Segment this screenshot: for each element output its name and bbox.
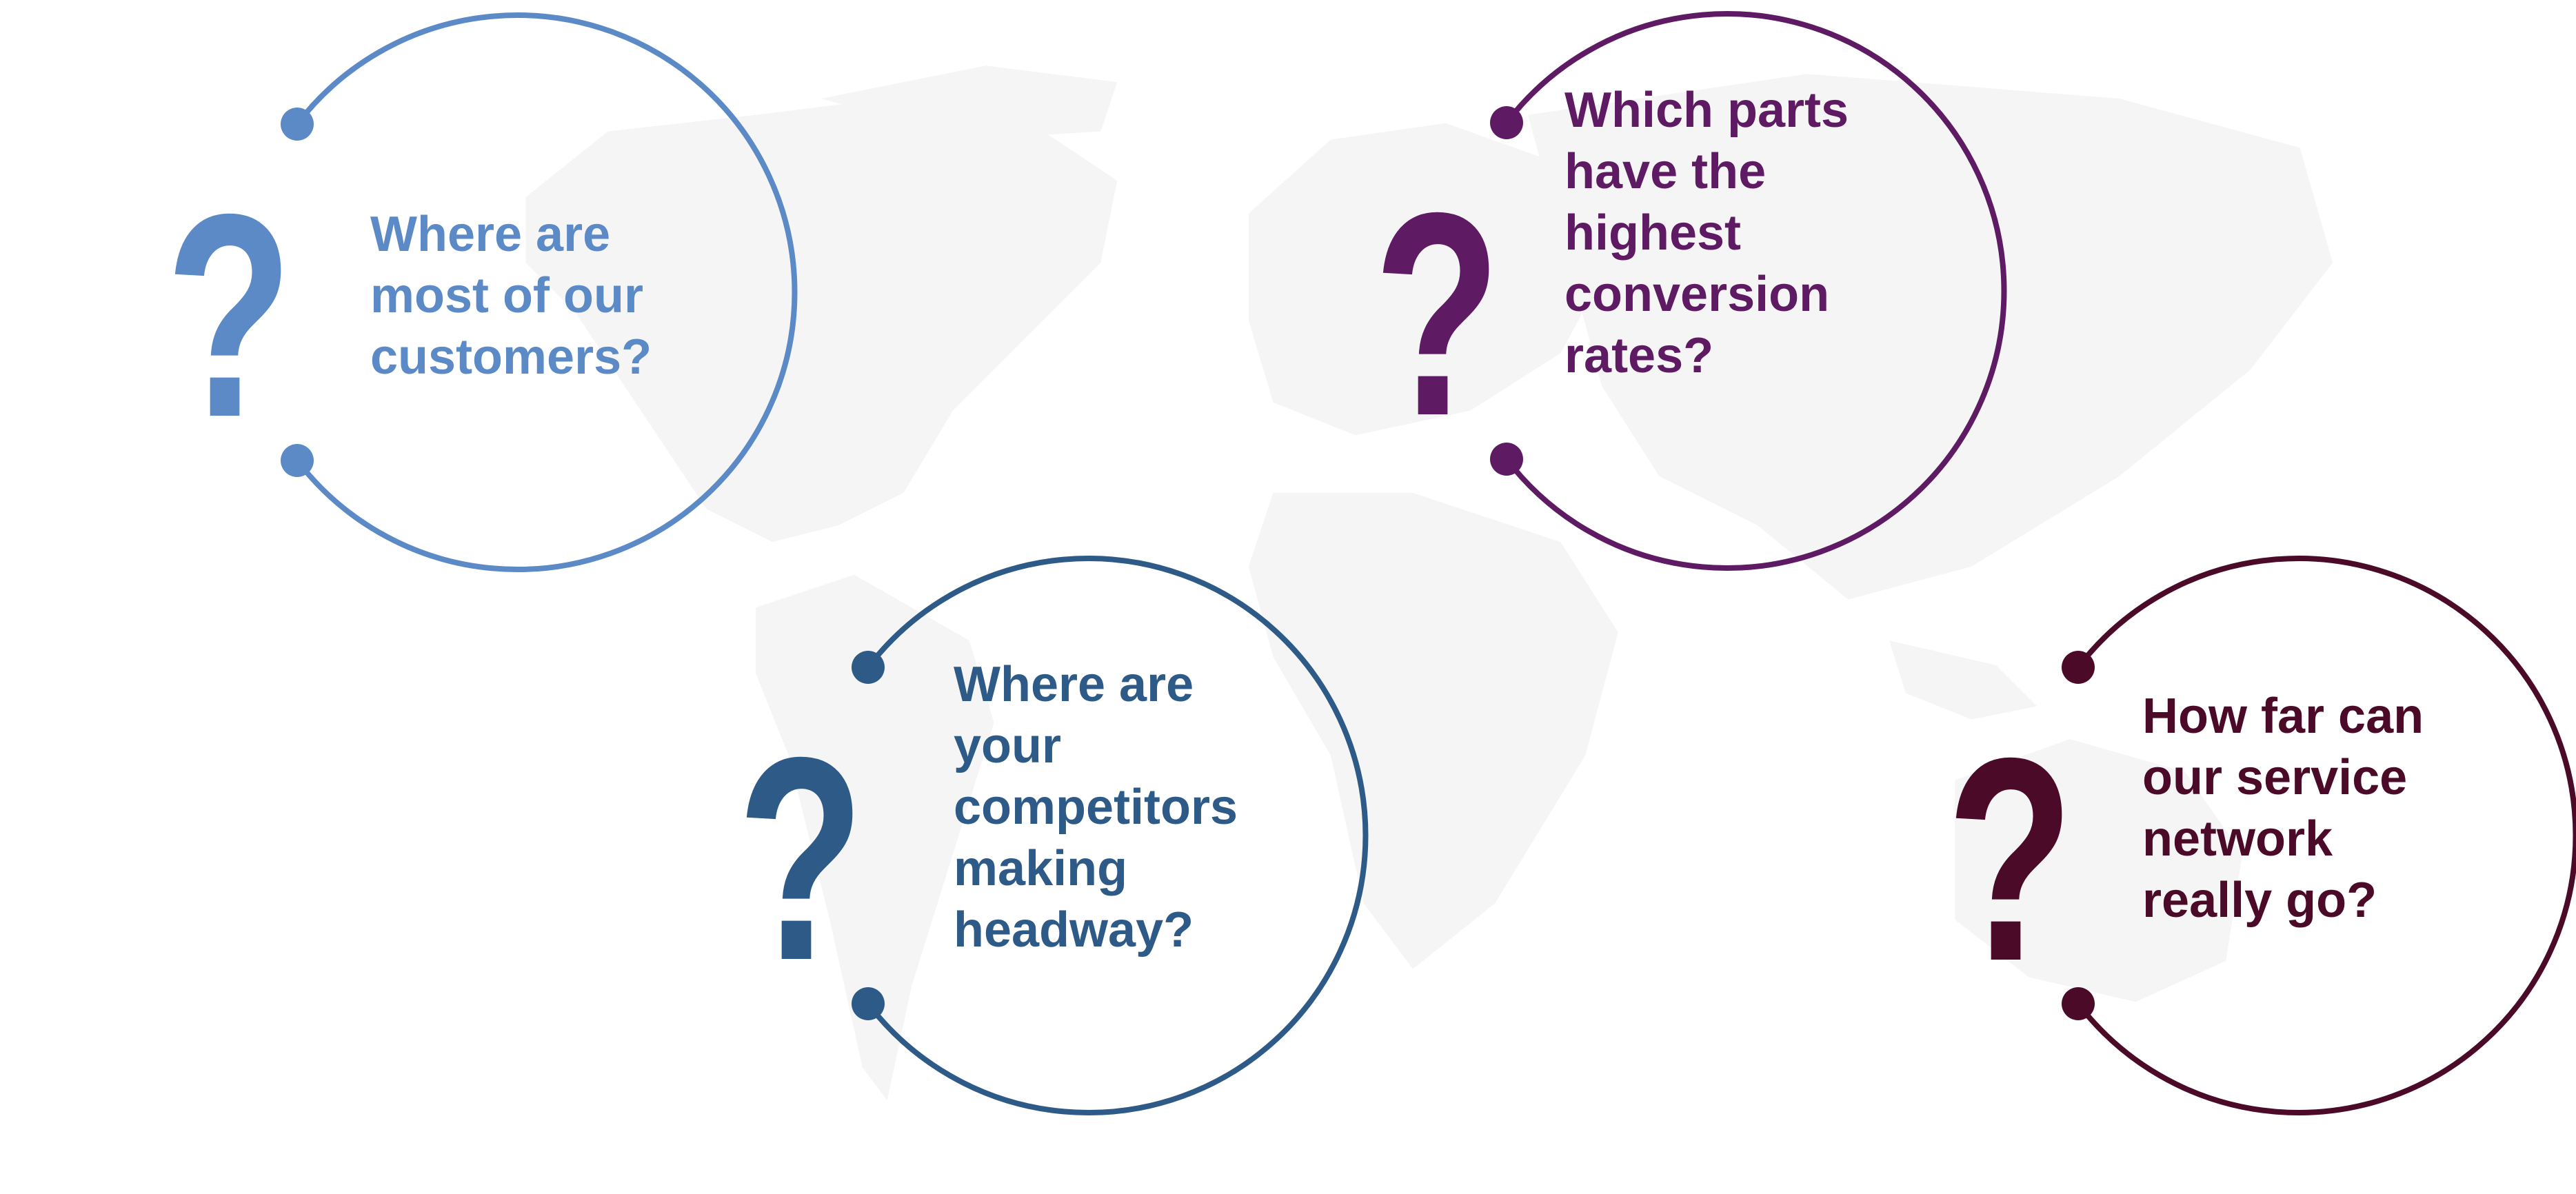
text (370, 207, 652, 385)
text (2142, 689, 2424, 928)
text: customers? (370, 330, 652, 385)
panel: competitors headway (737, 556, 1368, 1115)
icon: question mark: ? (1946, 698, 2074, 1022)
text: headway? (954, 902, 1194, 958)
text: Where are (954, 657, 1194, 712)
circle arc (852, 556, 1368, 1115)
text: conversion (1564, 267, 1829, 322)
text: competitors (954, 780, 1238, 835)
icon: question mark: ? (165, 154, 293, 478)
text (1564, 83, 1849, 383)
circle arc (281, 12, 797, 572)
panel: highest conversion rates (1373, 11, 2006, 571)
text: Which parts (1564, 83, 1849, 138)
text: our service (2142, 750, 2407, 805)
text: most of our (370, 268, 643, 323)
panel: service network reach (1946, 556, 2576, 1115)
text: Where are (370, 207, 610, 262)
panel: where are most of our customers (165, 12, 797, 572)
text: have the (1564, 144, 1766, 199)
text: rates? (1564, 328, 1713, 383)
text: highest (1564, 205, 1741, 261)
text: your (954, 718, 1061, 773)
text (954, 657, 1238, 958)
icon: question mark: ? (737, 698, 865, 1021)
text: making (954, 841, 1127, 896)
text: network (2142, 811, 2333, 867)
circle arc (2062, 556, 2576, 1115)
text: How far can (2142, 689, 2424, 744)
icon: question mark: ? (1373, 153, 1501, 476)
circle arc (1490, 11, 2006, 571)
text: really go? (2142, 873, 2377, 928)
